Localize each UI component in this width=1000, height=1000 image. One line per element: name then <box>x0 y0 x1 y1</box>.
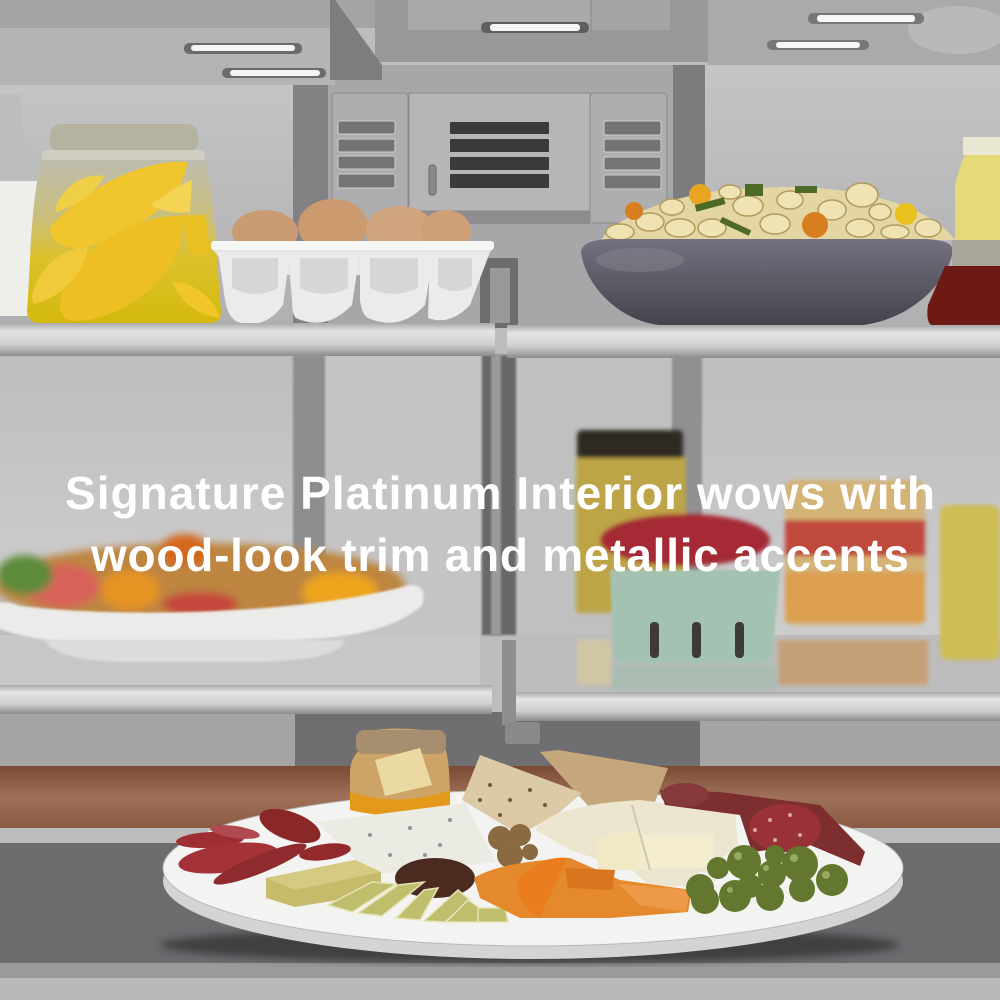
cheese wedges <box>328 882 508 922</box>
blue cheese <box>316 803 496 875</box>
brie <box>535 800 738 872</box>
headline: wood-look trim and metallic accents <box>90 529 909 581</box>
headline: Signature Platinum Interior wows with <box>65 467 935 519</box>
dried fruit <box>395 858 475 898</box>
green cheese <box>266 860 381 907</box>
lower shelf glass <box>0 635 1000 695</box>
mango jar <box>27 124 221 323</box>
lower counter and dark mat <box>0 828 1000 1000</box>
upper shelf <box>0 323 1000 358</box>
olives <box>686 845 848 914</box>
nuts <box>488 824 538 868</box>
salami <box>176 802 352 891</box>
wood trim <box>0 766 1000 828</box>
orange slices <box>474 858 692 918</box>
air vent panel <box>332 93 667 224</box>
centre hinge bar <box>480 258 518 635</box>
blurred fruit plate <box>0 534 424 662</box>
ceiling with lights <box>0 0 1000 85</box>
blurred jar and food behind the headline <box>576 430 1000 660</box>
charcuterie platter <box>163 728 903 959</box>
pasta bowl <box>581 183 955 326</box>
berry basket <box>610 570 780 690</box>
headline <box>65 467 935 581</box>
honey jar <box>350 728 450 816</box>
right salami <box>660 783 865 866</box>
egg tray <box>211 199 494 324</box>
milk bottle <box>0 95 45 316</box>
mustard jar and jam jar <box>927 137 1000 326</box>
lower shelf fronts <box>0 640 1000 744</box>
crackers <box>540 750 668 808</box>
